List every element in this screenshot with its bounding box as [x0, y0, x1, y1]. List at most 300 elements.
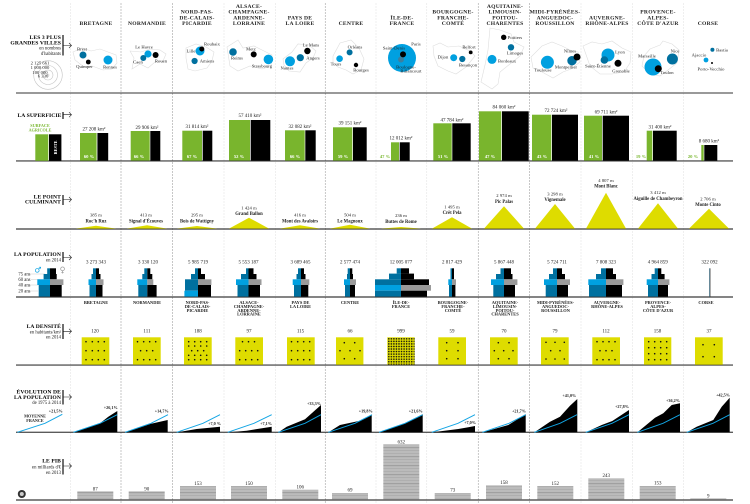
row label: le PIB: LE PIB [42, 458, 61, 464]
bar: Alsace-Champagne-Ardenne-Lorraine: 150 [245, 482, 253, 487]
density: Île-de-France 999 [387, 330, 415, 365]
map: Centre: Bourges [353, 68, 369, 72]
bars: Nord-Pas-de-Calais-Picardie: 31 814 km² [186, 124, 209, 130]
map: Normandie: Caen [133, 60, 143, 65]
bars: Auvergne-Rhône-Alpes: 41 % [589, 154, 600, 159]
panel: population [14, 252, 718, 297]
heading: Bourgogne-Franche-Comté: COMTÉ [442, 19, 464, 27]
value and pyramid: Provence-Alpes-Côte d'Azur [647, 261, 669, 297]
map: Île-de-France: Saint-Denis [383, 46, 405, 50]
density: Bourgogne-Franche-Comté 59: 59 [450, 330, 455, 335]
map: Bretagne: Quimper [76, 64, 93, 69]
map: Bretagne [73, 46, 117, 70]
heading: Aquitaine-Limousin-Poitou-Charentes: POITOU- [492, 15, 518, 21]
bar: Auvergne-Rhône-Alpes [588, 474, 624, 500]
bar: Provence-Alpes-Côte d'Azur [640, 482, 676, 500]
density: Corse 37: 37 [706, 330, 712, 335]
density: Île-de-France 999: 999 [397, 330, 405, 335]
peak: Midi-Pyrénées-Languedoc-Roussillon: Vignemale [544, 198, 566, 203]
value and pyramid: Midi-Pyrénées-Languedoc-Roussillon: 5 724 711 [547, 261, 567, 266]
value and pyramid: Nord-Pas-de-Calais-Picardie: 5 985 719 [188, 261, 208, 266]
peak: Bourgogne-Franche-Comté [432, 204, 472, 229]
bars: Midi-Pyrénées-Languedoc-Roussillon: 43 % [537, 154, 548, 159]
density: Pays de la Loire 115 [287, 330, 315, 365]
row label: la population [14, 252, 72, 264]
bar: Normandie [129, 488, 165, 500]
name: Nord-Pas-de-Calais-Picardie: DE-CALAIS- [185, 304, 211, 309]
heading: Bretagne: BRETAGNE [80, 21, 113, 27]
bars: Provence-Alpes-Côte d'Azur: 19 % [636, 154, 647, 159]
peak: Centre: 504 m [344, 212, 356, 218]
line chart: Aquitaine-Limousin-Poitou-Charentes: +21,7% [512, 408, 526, 413]
bars: Bourgogne-Franche-Comté: 47 784 km² [441, 117, 464, 123]
bars: Auvergne-Rhône-Alpes [584, 109, 629, 161]
name: Alsace-Champagne-Ardenne-Lorraine: ARDENNE- [237, 308, 261, 313]
legend: population pyramid with ages: 20 ans [18, 289, 31, 294]
line chart: Corse [687, 392, 730, 432]
row label: le PIB [32, 458, 72, 476]
map: Bourgogne-Franche-Comté: Besançon [459, 62, 478, 68]
peak: Aquitaine-Limousin-Poitou-Charentes [484, 193, 524, 229]
peak: Bourgogne-Franche-Comté: 1 495 m [444, 204, 460, 210]
map: Corse: Porto-Vecchio [698, 66, 725, 72]
bars: Pays de la Loire [285, 124, 316, 161]
legend: French average line [17, 408, 63, 432]
bar: Centre: 69 [348, 489, 353, 494]
line chart: Pays de la Loire [278, 401, 321, 432]
map: Provence-Alpes-Côte d'Azur: Toulon [660, 70, 674, 75]
legend: circle sizes: 6 336 [38, 74, 49, 79]
map: Provence-Alpes-Côte d'Azur [638, 41, 679, 76]
row label: les 3 plus grandes villes [10, 35, 72, 57]
map: Île-de-France [383, 42, 422, 74]
row label: le PIB: en milliards d'€ [32, 466, 62, 470]
panel: highest point [25, 178, 729, 229]
heading: Auvergne-Rhône-Alpes: RHÔNE-ALPES [585, 19, 629, 27]
legend: agricultural surface and rest: SURFACE [30, 123, 50, 128]
bars: Auvergne-Rhône-Alpes: 69 711 km² [595, 109, 618, 115]
bars: Pays de la Loire: 66 % [290, 154, 301, 159]
bar: Provence-Alpes-Côte d'Azur: 153 [654, 482, 662, 486]
map: Auvergne-Rhône-Alpes: Grenoble [612, 68, 630, 74]
bars: Nord-Pas-de-Calais-Picardie: 67 % [187, 154, 198, 159]
map: Pays de la Loire: Angers [306, 56, 320, 61]
panel: region names under population [84, 300, 714, 317]
name: Auvergne-Rhône-Alpes: RHÔNE-ALPES [591, 304, 623, 309]
density: Auvergne-Rhône-Alpes 112: 112 [602, 330, 610, 335]
name: Bourgogne-Franche-Comté: BOURGOGNE- [438, 300, 469, 305]
panel: density [27, 322, 723, 365]
bars: Provence-Alpes-Côte d'Azur [636, 125, 677, 161]
bar: Normandie: 90 [144, 488, 150, 492]
peak: Alsace-Champagne-Ardenne-Lorraine: Grand Ballon [235, 212, 263, 217]
name: Provence-Alpes-Côte d'Azur: ALPES- [650, 304, 666, 309]
name: Aquitaine-Limousin-Poitou-Charentes: POITOU- [496, 308, 515, 313]
bars: Île-de-France: 47 % [380, 154, 391, 159]
name: Aquitaine-Limousin-Poitou-Charentes: LIMOUSIN- [493, 304, 518, 309]
line chart: Centre [328, 408, 373, 432]
value and pyramid: Normandie [137, 261, 158, 297]
heading: Alsace-Champagne-Ardenne-Lorraine: CHAMPAGNE- [228, 10, 270, 16]
peak: Bretagne [76, 212, 116, 229]
value and pyramid: Île-de-France: 12 005 077 [390, 261, 413, 266]
bars: Nord-Pas-de-Calais-Picardie [182, 124, 212, 161]
name: Provence-Alpes-Côte d'Azur: CÔTE D'AZUR [643, 308, 674, 313]
row label: la population: LA POPULATION [14, 252, 61, 258]
peak: Auvergne-Rhône-Alpes [586, 178, 626, 229]
peak: Île-de-France: 236 m [395, 213, 407, 218]
map: Auvergne-Rhône-Alpes [583, 41, 631, 74]
map: Pays de la Loire: Nantes [280, 66, 294, 71]
peak: Pays de la Loire [280, 212, 320, 229]
legend: population pyramid with ages: 75 ans [18, 272, 31, 278]
map: Normandie: Le Havre [135, 45, 153, 50]
map: Auvergne-Rhône-Alpes: Lyon [615, 50, 625, 54]
map: Corse [692, 48, 728, 72]
bars: Île-de-France [380, 136, 413, 161]
heading: Midi-Pyrénées-Languedoc-Roussillon: MIDI-PYRÉNÉES- [530, 8, 580, 16]
heading: Pays de la Loire: LA LOIRE [286, 21, 314, 27]
value and pyramid: Pays de la Loire: 3 689 465 [290, 261, 311, 266]
name: Alsace-Champagne-Ardenne-Lorraine: LORRAINE [237, 312, 261, 317]
peak: Nord-Pas-de-Calais-Picardie: 295 m [191, 212, 203, 218]
map: Aquitaine-Limousin-Poitou-Charentes: Poitiers [508, 35, 522, 40]
peak: Midi-Pyrénées-Languedoc-Roussillon [535, 192, 575, 229]
legend: circle sizes: 1 000 000 [31, 65, 50, 70]
line chart: Nord-Pas-de-Calais-Picardie: +7,0 % [208, 421, 221, 426]
name: Pays de la Loire: LA LOIRE [290, 304, 311, 309]
bars: Île-de-France: 12 012 km² [390, 136, 413, 142]
density: Provence-Alpes-Côte d'Azur 158 [644, 330, 671, 365]
value and pyramid: Centre: 2 577 474 [340, 261, 360, 266]
name: Provence-Alpes-Côte d'Azur: PROVENCE- [645, 300, 672, 305]
heading: Provence-Alpes-Côte d'Azur: PROVENCE- [640, 10, 676, 16]
heading: Bourgogne-Franche-Comté: BOURGOGNE- [432, 10, 474, 16]
density: Corse 37 [695, 330, 723, 365]
line chart: Midi-Pyrénées-Languedoc-Roussillon: +41,0% [562, 393, 576, 398]
bars: Midi-Pyrénées-Languedoc-Roussillon: 72 724 km² [545, 108, 568, 114]
bars: Normandie: 29 906 km² [136, 125, 159, 131]
map: Provence-Alpes-Côte d'Azur: Nice [671, 48, 679, 54]
density: Pays de la Loire 115: 115 [297, 330, 305, 335]
row label: évolution de la population: de 1975 à 2014 [32, 401, 62, 406]
map: Alsace-Champagne-Ardenne-Lorraine: Reims [231, 56, 243, 61]
panel: GDP [18, 440, 726, 500]
density: Bourgogne-Franche-Comté 59 [438, 330, 466, 365]
legend: population pyramid with ages [18, 266, 66, 297]
map: Pays de la Loire [280, 42, 320, 72]
value and pyramid: Auvergne-Rhône-Alpes [588, 261, 623, 297]
map: Aquitaine-Limousin-Poitou-Charentes: Bordeaux [498, 58, 517, 64]
name: Normandie: NORMANDIE [133, 300, 161, 305]
line chart: Normandie [125, 408, 169, 432]
value and pyramid: Pays de la Loire [290, 261, 311, 297]
bar: Île-de-France: 632 [398, 440, 406, 445]
line chart: Île-de-France: +21,6% [409, 408, 423, 413]
map: Corse: Bastia [716, 48, 728, 52]
legend: population pyramid with ages: ♀ [60, 266, 66, 274]
density: Centre 66 [336, 330, 363, 365]
value and pyramid: Provence-Alpes-Côte d'Azur: 4 964 859 [648, 261, 668, 266]
line chart: Provence-Alpes-Côte d'Azur: +36,2% [666, 398, 680, 403]
bars: Corse: 20 % [688, 154, 699, 159]
map: Centre [331, 40, 369, 74]
heading: Bourgogne-Franche-Comté: FRANCHE- [437, 15, 469, 21]
row label: la densité: en habitants/km² [30, 329, 62, 335]
bars: Bretagne: 60 % [84, 154, 95, 159]
name: Nord-Pas-de-Calais-Picardie: NORD-PAS- [186, 300, 210, 305]
value and pyramid: Corse [701, 261, 718, 297]
line chart: Bretagne [73, 405, 118, 432]
line chart: Auvergne-Rhône-Alpes: +27,8% [615, 404, 629, 409]
peak: Bourgogne-Franche-Comté: Crêt Pela [443, 211, 462, 216]
row label: la densité: LA DENSITÉ [27, 322, 61, 330]
icon: logo seal [18, 490, 26, 498]
name: Aquitaine-Limousin-Poitou-Charentes: AQUITAINE- [492, 300, 519, 305]
map: Île-de-France: Billancourt [400, 68, 422, 74]
peak: Île-de-France [381, 213, 421, 229]
value and pyramid: Auvergne-Rhône-Alpes: 7 808 323 [596, 261, 616, 266]
bars: Alsace-Champagne-Ardenne-Lorraine: 57 410 km² [239, 113, 262, 119]
map: Provence-Alpes-Côte d'Azur: Marseille [638, 54, 656, 58]
peak: Pays de la Loire: Mont des Avaloirs [282, 220, 318, 224]
name: Midi-Pyrénées-Languedoc-Roussillon: ANGUEDOC- [542, 304, 570, 309]
name: Aquitaine-Limousin-Poitou-Charentes: CHARENTES [491, 312, 519, 317]
row label: la population: en 2014 [46, 258, 62, 264]
bar: Bretagne [77, 488, 113, 500]
row label: la superficie: LA SUPERFICIE [17, 113, 62, 119]
legend: population pyramid with ages: 40 ans [18, 284, 31, 289]
value and pyramid: Centre [340, 261, 360, 297]
density: Normandie 111: 111 [143, 330, 151, 335]
bars: Corse: 8 680 km² [699, 139, 720, 145]
legend: population pyramid with ages: ♂ [34, 266, 42, 274]
density: Aquitaine-Limousin-Poitou-Charentes 70: 70 [502, 330, 507, 335]
line chart: Bourgogne-Franche-Comté: +7,0% [464, 420, 476, 425]
row label: le point culminant: CULMINANT [25, 200, 61, 206]
heading: Alsace-Champagne-Ardenne-Lorraine: LORRAINE [233, 21, 265, 27]
peak: Alsace-Champagne-Ardenne-Lorraine [229, 206, 269, 229]
bars: Midi-Pyrénées-Languedoc-Roussillon [532, 108, 578, 161]
bars: Normandie [131, 125, 160, 161]
row label: les 3 plus grandes villes: LES 3 PLUS [30, 35, 61, 41]
map: Bourgogne-Franche-Comté: Belfort [462, 44, 476, 50]
name: Auvergne-Rhône-Alpes: AUVERGNE- [594, 300, 621, 305]
heading: Île-de-France: ÎLE-DE- [391, 13, 413, 21]
row label: les 3 plus grandes villes: d'habitants [41, 52, 61, 57]
bars: Alsace-Champagne-Ardenne-Lorraine [229, 113, 270, 161]
row label: la densité [27, 322, 72, 341]
peak: Normandie [127, 212, 167, 229]
map: Bourgogne-Franche-Comté [433, 43, 478, 74]
peak: Nord-Pas-de-Calais-Picardie [177, 212, 217, 229]
row label: les 3 plus grandes villes: GRANDES VILLES [10, 40, 61, 46]
density: Alsace-Champagne-Ardenne-Lorraine 97: 97 [246, 330, 252, 335]
legend: circle sizes: 100 000 [32, 70, 48, 75]
peak: Alsace-Champagne-Ardenne-Lorraine: 1 424 m [241, 206, 257, 210]
value and pyramid: Île-de-France [375, 261, 431, 297]
name: Bourgogne-Franche-Comté: COMTÉ [445, 308, 461, 313]
map: Aquitaine-Limousin-Poitou-Charentes: Limoges [507, 50, 523, 56]
line chart: Alsace-Champagne-Ardenne-Lorraine: +7,1% [260, 421, 272, 426]
bar: Nord-Pas-de-Calais-Picardie [180, 482, 216, 500]
peak: Centre: Le Magnoux [337, 220, 363, 224]
heading: Pays de la Loire: PAYS DE [288, 15, 312, 21]
panel: region headings [80, 4, 718, 27]
map: Midi-Pyrénées-Languedoc-Roussillon: Montpellier [555, 64, 578, 70]
row label: évolution de la population: ÉVOLUTION DE [17, 388, 61, 396]
bars: Pays de la Loire: 32 082 km² [289, 124, 312, 130]
heading: Midi-Pyrénées-Languedoc-Roussillon: ROUSSILLON [535, 21, 575, 27]
bar: Bourgogne-Franche-Comté: 73 [450, 489, 456, 494]
bars: Bretagne [80, 126, 108, 161]
legend: French average line: FRANCE [26, 418, 44, 423]
name: Alsace-Champagne-Ardenne-Lorraine: CHAMPAGNE- [234, 304, 265, 309]
map: Alsace-Champagne-Ardenne-Lorraine: Strasbourg [252, 64, 273, 68]
heading: Alsace-Champagne-Ardenne-Lorraine: ALSACE- [236, 4, 262, 10]
heading: Provence-Alpes-Côte d'Azur: CÔTE D'AZUR [637, 19, 679, 27]
row label: le point culminant: LE POINT [34, 194, 61, 200]
bar: Nord-Pas-de-Calais-Picardie: 153 [194, 482, 202, 487]
bars: Bourgogne-Franche-Comté: 51 % [438, 154, 449, 159]
name: Pays de la Loire: PAYS DE [292, 300, 310, 305]
row label: le point culminant [25, 194, 72, 206]
line chart: Alsace-Champagne-Ardenne-Lorraine [228, 415, 272, 432]
peak: Centre [330, 212, 370, 229]
line chart: Auvergne-Rhône-Alpes [586, 404, 629, 432]
map: Midi-Pyrénées-Languedoc-Roussillon: Toulouse [534, 68, 552, 72]
peak: Corse: 2 706 m [700, 196, 716, 202]
name: Bretagne: BRETAGNE [84, 300, 108, 305]
bars: Aquitaine-Limousin-Poitou-Charentes: 84 060 km² [493, 105, 516, 111]
legend: circle sizes [31, 60, 62, 89]
value and pyramid: Aquitaine-Limousin-Poitou-Charentes [491, 261, 517, 297]
bars: Centre: 39 151 km² [339, 120, 362, 126]
peak: Auvergne-Rhône-Alpes: 4 807 m [598, 178, 614, 183]
bars: Corse [688, 139, 720, 161]
name: Île-de-France: ÎLE-DE- [393, 300, 410, 305]
bar: Pays de la Loire: 106 [297, 486, 305, 490]
peak: Auvergne-Rhône-Alpes: Mont Blanc [594, 184, 618, 190]
peak: Aquitaine-Limousin-Poitou-Charentes: 2 974 m [496, 193, 512, 198]
legend: agricultural surface and rest [29, 123, 61, 161]
heading: Normandie: NORMANDIE [128, 21, 166, 27]
heading: Midi-Pyrénées-Languedoc-Roussillon: ANGUEDOC- [537, 15, 573, 21]
value and pyramid: Normandie: 3 330 120 [138, 261, 158, 266]
legend: agricultural surface and rest: AGRICOLE [29, 128, 52, 132]
peak: Midi-Pyrénées-Languedoc-Roussillon: 3 298 m [547, 192, 563, 196]
heading: Provence-Alpes-Côte d'Azur: ALPES- [647, 15, 669, 21]
heading: Aquitaine-Limousin-Poitou-Charentes: LIMOUSIN- [488, 10, 522, 16]
density: Midi-Pyrénées-Languedoc-Roussillon 79 [541, 330, 569, 365]
density: Midi-Pyrénées-Languedoc-Roussillon 79: 79 [552, 330, 558, 335]
value and pyramid: Alsace-Champagne-Ardenne-Lorraine: 5 553 187 [238, 261, 259, 266]
heading: Nord-Pas-de-Calais-Picardie: DE-CALAIS- [179, 15, 215, 21]
peak: Bretagne: Roc'h Ruz [86, 220, 106, 224]
map: Pays de la Loire: Le Mans [303, 42, 319, 48]
map: Île-de-France: Boulogne- [396, 64, 416, 70]
line chart: Corse: +42,5% [716, 392, 730, 398]
bars: Normandie: 66 % [134, 154, 145, 159]
value and pyramid: Corse: 322 092 [701, 261, 718, 266]
map: Alsace-Champagne-Ardenne-Lorraine: Metz [246, 46, 256, 52]
bar: Île-de-France [383, 440, 419, 500]
map: Centre: Orléans [348, 44, 362, 50]
peak: Corse: Monte Cinto [695, 203, 721, 208]
bars: Provence-Alpes-Côte d'Azur: 31 400 km² [649, 125, 672, 131]
line chart: Pays de la Loire: +33,3% [307, 401, 321, 406]
heading: Centre: CENTRE [339, 21, 363, 27]
legend: circle sizes: 2 125 661 [31, 60, 50, 66]
bars: Aquitaine-Limousin-Poitou-Charentes [479, 105, 529, 161]
bar: Centre [332, 489, 368, 500]
map: Nord-Pas-de-Calais-Picardie [186, 42, 221, 71]
bar: Corse: 9 [707, 494, 710, 500]
map: Bretagne: Brest [77, 46, 88, 52]
name: Corse: CORSE [698, 300, 714, 305]
density: Bretagne 120: 120 [91, 330, 99, 335]
row label: la densité: en 2014 [46, 336, 62, 341]
map: Normandie [130, 45, 168, 69]
panel: population change [14, 388, 730, 432]
row label: évolution de la population: LA POPULATION [14, 395, 61, 401]
bars: Alsace-Champagne-Ardenne-Lorraine: 52 % [234, 154, 245, 159]
peak: Provence-Alpes-Côte d'Azur [634, 190, 683, 229]
legend: agricultural surface and rest: RESTE [53, 140, 58, 154]
bar: Bourgogne-Franche-Comté [435, 489, 471, 500]
map: Auvergne-Rhône-Alpes: Saint-Étienne [585, 64, 611, 68]
peak: Pays de la Loire: 416 m [294, 212, 306, 218]
legend: population pyramid with ages: 60 ans [18, 278, 31, 283]
row label: le PIB: en 2013 [46, 471, 62, 476]
row label: évolution de la population [14, 388, 72, 406]
heading: Corse: CORSE [698, 21, 718, 27]
line chart: Bourgogne-Franche-Comté [432, 415, 476, 432]
line chart: Bretagne: +26,1% [104, 405, 118, 410]
name: Centre: CENTRE [341, 300, 359, 305]
bars: Centre: 59 % [338, 154, 349, 159]
peak: Normandie: 413 m [140, 212, 152, 218]
line chart: Normandie: +14,7% [155, 408, 169, 413]
bar: Auvergne-Rhône-Alpes: 243 [603, 474, 611, 479]
map: Bourgogne-Franche-Comté: Dijon [438, 54, 449, 60]
bar: Midi-Pyrénées-Languedoc-Roussillon [537, 482, 573, 500]
map: Bretagne: Rennes [103, 64, 117, 70]
map: Nord-Pas-de-Calais-Picardie: Roubaix [204, 42, 221, 46]
line chart: Île-de-France [379, 408, 423, 432]
panel: surface area [17, 105, 720, 161]
bar: Alsace-Champagne-Ardenne-Lorraine [231, 482, 267, 500]
map: Nord-Pas-de-Calais-Picardie: Amiens [200, 58, 214, 64]
density: Alsace-Champagne-Ardenne-Lorraine 97 [235, 330, 263, 365]
peak: Nord-Pas-de-Calais-Picardie: Bois de Wattigny [180, 220, 215, 224]
density: Aquitaine-Limousin-Poitou-Charentes 70 [490, 330, 518, 365]
map: Midi-Pyrénées-Languedoc-Roussillon: Nîmes [564, 48, 576, 54]
bar: Pays de la Loire [282, 486, 318, 500]
row label: la superficie [17, 112, 72, 119]
peak: Provence-Alpes-Côte d'Azur: Aiguille de Chambeyron [634, 197, 683, 202]
peak: Bretagne: 385 m [90, 212, 102, 218]
density: Normandie 111 [133, 330, 161, 365]
value and pyramid: Bretagne [86, 261, 106, 297]
peak: Île-de-France: Buttes de Rome [385, 220, 417, 225]
map: Alsace-Champagne-Ardenne-Lorraine [227, 40, 273, 71]
name: Midi-Pyrénées-Languedoc-Roussillon: MIDI-PYRÉNÉES- [537, 300, 575, 305]
map: Île-de-France: Paris [411, 42, 421, 46]
density: Nord-Pas-de-Calais-Picardie 188 [184, 330, 212, 365]
peak: Normandie: Signal d'Écouves [129, 218, 163, 224]
line chart: Provence-Alpes-Côte d'Azur [637, 398, 680, 432]
